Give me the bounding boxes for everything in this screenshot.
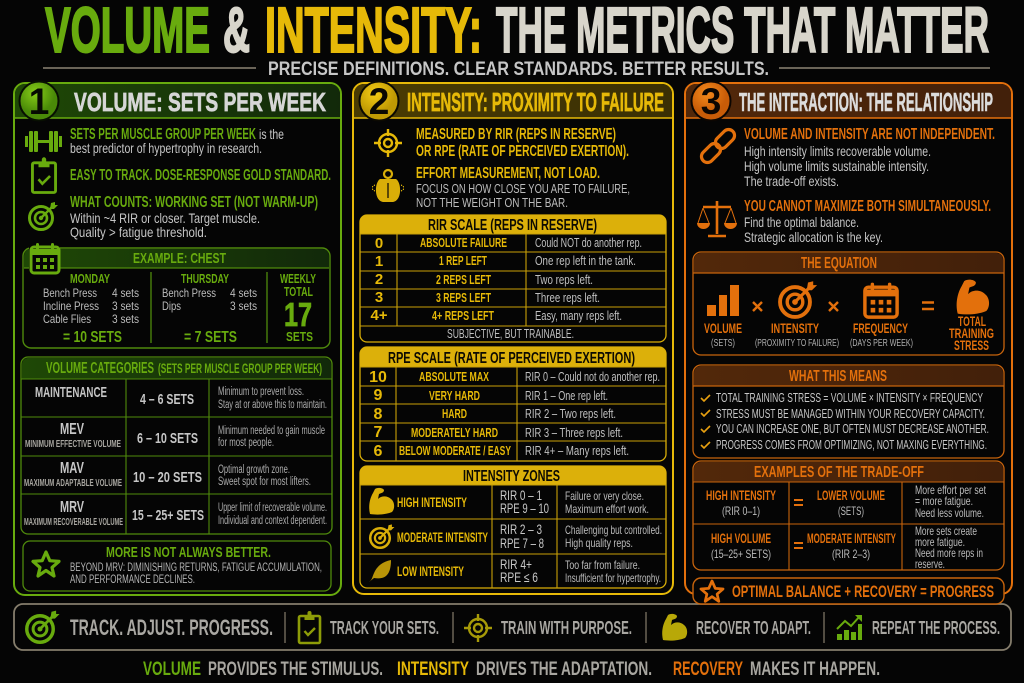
examples of the trade-off: = more fatigue. [915,494,973,508]
text: what counts [70,194,318,240]
equation box: STRESS [954,338,989,353]
icon: growth chart [837,615,862,640]
callout: more is not always better: AND PERFORMANCE DECLINES. [70,574,195,586]
bottom bar [14,604,1011,650]
table: intensity zones: Too far from failure. [565,558,640,572]
examples of the trade-off: (RIR 2–3) [832,547,870,561]
badge 1 [20,81,58,122]
monday column: 4 sets [112,286,139,300]
bottom bar: TRACK YOUR SETS. [330,618,439,638]
examples of the trade-off: reserve. [915,557,945,571]
badge 2 [360,81,398,122]
examples of the trade-off: More sets create [915,524,977,538]
examples of the trade-off: HIGH VOLUME [711,531,771,546]
panel: interaction [685,81,1012,594]
icon: calendar [29,243,60,273]
table: RIR scale: 2 REPS LEFT [436,273,491,287]
table: RIR scale: One rep left in the tank. [535,254,636,268]
badge 3 [692,81,730,122]
volume categories table: Sweet spot for most lifters. [218,476,311,488]
thursday column: Bench Press [162,286,216,300]
table: intensity zones: RIR 2 – 3 [500,522,542,537]
footer tagline: DRIVES THE ADAPTATION. [476,659,652,680]
table: RIR scale: Could NOT do another rep. [535,236,642,250]
footer tagline [143,659,880,680]
footer tagline: RECOVERY [673,659,743,680]
table: intensity zones: MODERATE INTENSITY [397,530,488,545]
weekly total: 17 [284,296,312,333]
panel: intensity [353,81,673,594]
monday column: 3 sets [112,299,139,313]
icon: clipboard [32,157,56,192]
table: RPE scale: MODERATELY HARD [411,426,498,440]
table: RIR scale: 0 [375,235,383,252]
table: intensity zones: RIR 0 – 1 [500,488,542,503]
weekly total: SETS [286,329,313,344]
table: RPE scale: VERY HARD [429,389,480,403]
text: sets per muscle group: is the [259,126,284,142]
text: not independent: High intensity limits recoverable volume. [744,143,931,159]
table: RPE scale: 7 [374,424,383,441]
icon: bars [707,285,739,316]
icon: flexed arm [957,280,989,314]
thursday column: 4 sets [230,286,257,300]
text: measured by: OR RPE (RATE OF PERCEIVED EXERTION). [416,143,629,160]
heading: volume: VOLUME: SETS PER WEEK [74,87,326,117]
footer tagline: MAKES IT HAPPEN. [750,659,880,680]
volume categories table: Upper limit of recoverable volume. [218,502,327,514]
title [45,0,989,66]
icon: target [370,524,394,548]
icon: target [27,611,60,642]
table: RIR scale: 4+ REPS LEFT [432,309,494,323]
operator: times [829,302,838,311]
thursday column: THURSDAY [181,271,229,286]
equation box: TRAINING [949,326,994,341]
volume categories table: 4 – 6 SETS [140,391,194,408]
text: easy to track: EASY TO TRACK. DOSE-RESPONSE GOLD STANDARD. [70,167,331,184]
examples of the trade-off: Need less volume. [915,506,984,520]
volume categories table: Individual and context dependent. [218,515,327,527]
examples of the trade-off: more fatigue. [915,535,965,549]
thursday column [162,271,257,346]
table: intensity zones: HIGH INTENSITY [397,495,467,510]
bottom bar: RECOVER TO ADAPT. [696,618,811,638]
icon: calendar [865,283,897,317]
icon: crosshair [464,614,492,642]
table: RPE scale: 9 [374,387,383,404]
callout: more is not always better: BEYOND MRV: DIMINISHING RETURNS, FATIGUE ACCUMULATION, [70,562,322,574]
volume categories table: MRV [60,499,84,516]
table: RIR scale: Three reps left. [535,291,600,305]
table: RIR scale: Easy, many reps left. [535,309,622,323]
table: intensity zones: LOW INTENSITY [397,564,464,579]
table: intensity zones: Challenging but controlled. [565,523,662,537]
example: chest: EXAMPLE: CHEST [133,250,226,267]
text: cannot maximize both: Find the optimal balance. [744,214,859,230]
table: RIR scale: 3 [375,289,383,306]
thursday column: 3 sets [230,299,257,313]
volume categories table: 15 – 25+ SETS [132,507,204,524]
examples of the trade-off: LOWER VOLUME [817,488,885,503]
table: RIR scale [360,215,666,342]
equation box: VOLUME [704,321,742,336]
monday column [43,271,139,346]
table: RPE scale: 6 [374,443,383,460]
subtitle: PRECISE DEFINITIONS. CLEAR STANDARDS. BETTER RESULTS. [268,59,769,80]
volume categories table: MAV [60,460,84,477]
icon: target [30,202,58,230]
table: RPE scale: ABSOLUTE MAX [419,370,489,384]
thursday column: Dips [162,299,181,313]
operator: equals [922,302,934,309]
table: intensity zones: Maximum effort work. [565,502,649,516]
text: what counts: Within ~4 RIR or closer. Target muscle. [70,210,260,226]
operator: times [753,302,762,311]
volume categories table [21,357,332,534]
table: RPE scale: RIR 1 – One rep left. [525,389,608,403]
table: RPE scale: RIR 3 – Three reps left. [525,426,623,440]
volume categories table: Stay at or above this to maintain. [218,399,327,411]
badge 2: 2 [369,81,389,122]
table: RIR scale: ABSOLUTE FAILURE [420,236,507,250]
icon: scales [697,201,737,236]
equation box: THE EQUATION [801,255,877,272]
table: intensity zones: RPE 9 – 10 [500,501,549,516]
callout: more is not always better: MORE IS NOT ALWAYS BETTER. [106,544,271,561]
text: not independent [744,126,995,189]
monday column: = 10 SETS [63,329,122,346]
weekly total: WEEKLY [280,271,316,286]
equation box: TOTAL [958,314,986,329]
examples of the trade-off: More effort per set [915,483,986,497]
table: RIR scale: 1 [375,253,383,270]
text: effort measurement: EFFORT MEASUREMENT, NOT LOAD. [416,165,600,182]
volume categories table: Minimum needed to gain muscle [218,425,325,437]
equation box: (DAYS PER WEEK) [850,337,913,349]
table: RIR scale: SUBJECTIVE, BUT TRAINABLE. [447,327,574,341]
table: RPE scale: 8 [374,406,383,423]
text: sets per muscle group [70,126,284,156]
volume categories table: VOLUME CATEGORIES [46,360,154,377]
volume categories table: 10 – 20 SETS [133,469,202,486]
weekly total [280,271,316,344]
volume categories table: 6 – 10 SETS [137,430,198,447]
volume categories table: (SETS PER MUSCLE GROUP PER WEEK) [158,361,322,376]
table: intensity zones: High quality reps. [565,536,633,550]
heading: intensity: INTENSITY: PROXIMITY TO FAILURE [407,87,664,117]
examples of the trade-off: (RIR 0–1) [722,504,760,518]
table: RIR scale: 2 [375,271,383,288]
weekly total: TOTAL [284,284,313,299]
equation box: (SETS) [711,337,735,349]
table: RPE scale: RPE SCALE (RATE OF PERCEIVED EXERTION) [388,350,635,367]
equation box: (PROXIMITY TO FAILURE) [755,337,839,349]
table: RPE scale [360,347,666,461]
table: RPE scale: RIR 2 – Two reps left. [525,407,616,421]
panel: volume [14,81,341,595]
what this means: WHAT THIS MEANS [789,368,887,385]
table: RPE scale: RIR 0 – Could not do another rep. [525,370,660,384]
icon: flexed arm [662,614,687,641]
examples of the trade-off: Need more reps in [915,546,983,560]
volume categories table: MEV [60,421,84,438]
text: cannot maximize both: Strategic allocation is the key. [744,229,883,245]
monday column: Cable Flies [43,312,91,326]
monday column: 3 sets [112,312,139,326]
table: intensity zones: RIR 4+ [500,557,532,572]
volume categories table: MAXIMUM RECOVERABLE VOLUME [24,516,123,528]
table: intensity zones: Insufficient for hypertrophy. [565,571,661,585]
monday column: Incline Press [43,299,99,313]
table: RIR scale: Two reps left. [535,273,593,287]
table: RPE scale: RIR 4+ – Many reps left. [525,444,629,458]
icon: chain link [699,127,737,165]
volume categories table: for most people. [218,437,274,449]
bottom bar: TRAIN WITH PURPOSE. [501,618,632,638]
text: not independent: High volume limits sustainable intensity. [744,158,929,174]
text: effort measurement: FOCUS ON HOW CLOSE YOU ARE TO FAILURE, [416,181,630,196]
table: RIR scale: RIR SCALE (REPS IN RESERVE) [428,217,597,234]
examples of the trade-off: EXAMPLES OF THE TRADE-OFF [754,464,924,481]
callout: optimal balance [693,578,1004,604]
volume categories table: MINIMUM EFFECTIVE VOLUME [25,438,121,450]
badge 1: 1 [29,81,49,122]
examples of the trade-off: (SETS) [838,504,864,518]
text: cannot maximize both [744,198,991,245]
footer tagline: INTENSITY [397,659,469,680]
equation box [693,252,1004,355]
example: chest [23,248,330,348]
table: RPE scale: 10 [369,369,387,386]
icon: clipboard [299,611,320,643]
text: effort measurement: NOT THE WEIGHT ON THE BAR. [416,195,568,210]
volume categories table: MAINTENANCE [35,384,107,401]
table: RPE scale: BELOW MODERATE / EASY [399,444,511,458]
callout: more is not always better [23,541,331,591]
monday column: MONDAY [70,271,110,286]
icon: star [33,552,59,576]
volume categories table: Minimum to prevent loss. [218,386,304,398]
examples of the trade-off: (15–25+ SETS) [711,547,771,561]
what this means [693,365,1004,458]
text: not independent: The trade-off exists. [744,173,839,189]
table: intensity zones: INTENSITY ZONES [463,468,560,485]
equation box: FREQUENCY [853,321,908,336]
text: measured by: MEASURED BY RIR (REPS IN RESERVE) [416,126,616,143]
icon: leaf [369,560,391,582]
table: intensity zones [360,466,666,588]
thursday column: = 7 SETS [184,329,237,346]
text: sets per muscle group: best predictor of hypertrophy in research. [70,140,262,156]
table: RPE scale: HARD [442,407,467,421]
bottom bar: TRACK. ADJUST. PROGRESS. [70,615,273,640]
table: intensity zones: RPE 7 – 8 [500,536,544,551]
icon: flexed arm [369,488,394,515]
equation box: INTENSITY [771,321,819,336]
text: sets per muscle group: SETS PER MUSCLE GROUP PER WEEK [70,126,256,143]
footer tagline: VOLUME [143,659,201,680]
table: intensity zones: Failure or very close. [565,489,644,503]
examples of the trade-off: MODERATE INTENSITY [807,531,896,546]
badge 3: 3 [701,81,721,122]
table: RIR scale: 3 REPS LEFT [436,291,491,305]
icon: target [780,281,817,317]
icon: crosshair [374,129,402,157]
table: intensity zones: RPE ≤ 6 [500,570,538,585]
text: measured by [416,126,629,160]
examples of the trade-off [693,461,1004,571]
icon: star [701,581,723,601]
monday column: Bench Press [43,286,97,300]
footer tagline: PROVIDES THE STIMULUS. [208,659,383,680]
table: RIR scale: 1 REP LEFT [439,254,487,268]
icon: dumbbell [25,131,62,152]
volume categories table: MAXIMUM ADAPTABLE VOLUME [24,477,122,489]
text: effort measurement [416,165,630,210]
examples of the trade-off: HIGH INTENSITY [706,488,776,503]
table: RIR scale: 4+ [370,307,388,324]
text: what counts: Quality > fatigue threshold. [70,224,207,240]
volume categories table: Optimal growth zone. [218,464,290,476]
icon: effort weight [372,170,404,202]
text: what counts: WHAT COUNTS: WORKING SET (NOT WARM-UP) [70,194,318,211]
